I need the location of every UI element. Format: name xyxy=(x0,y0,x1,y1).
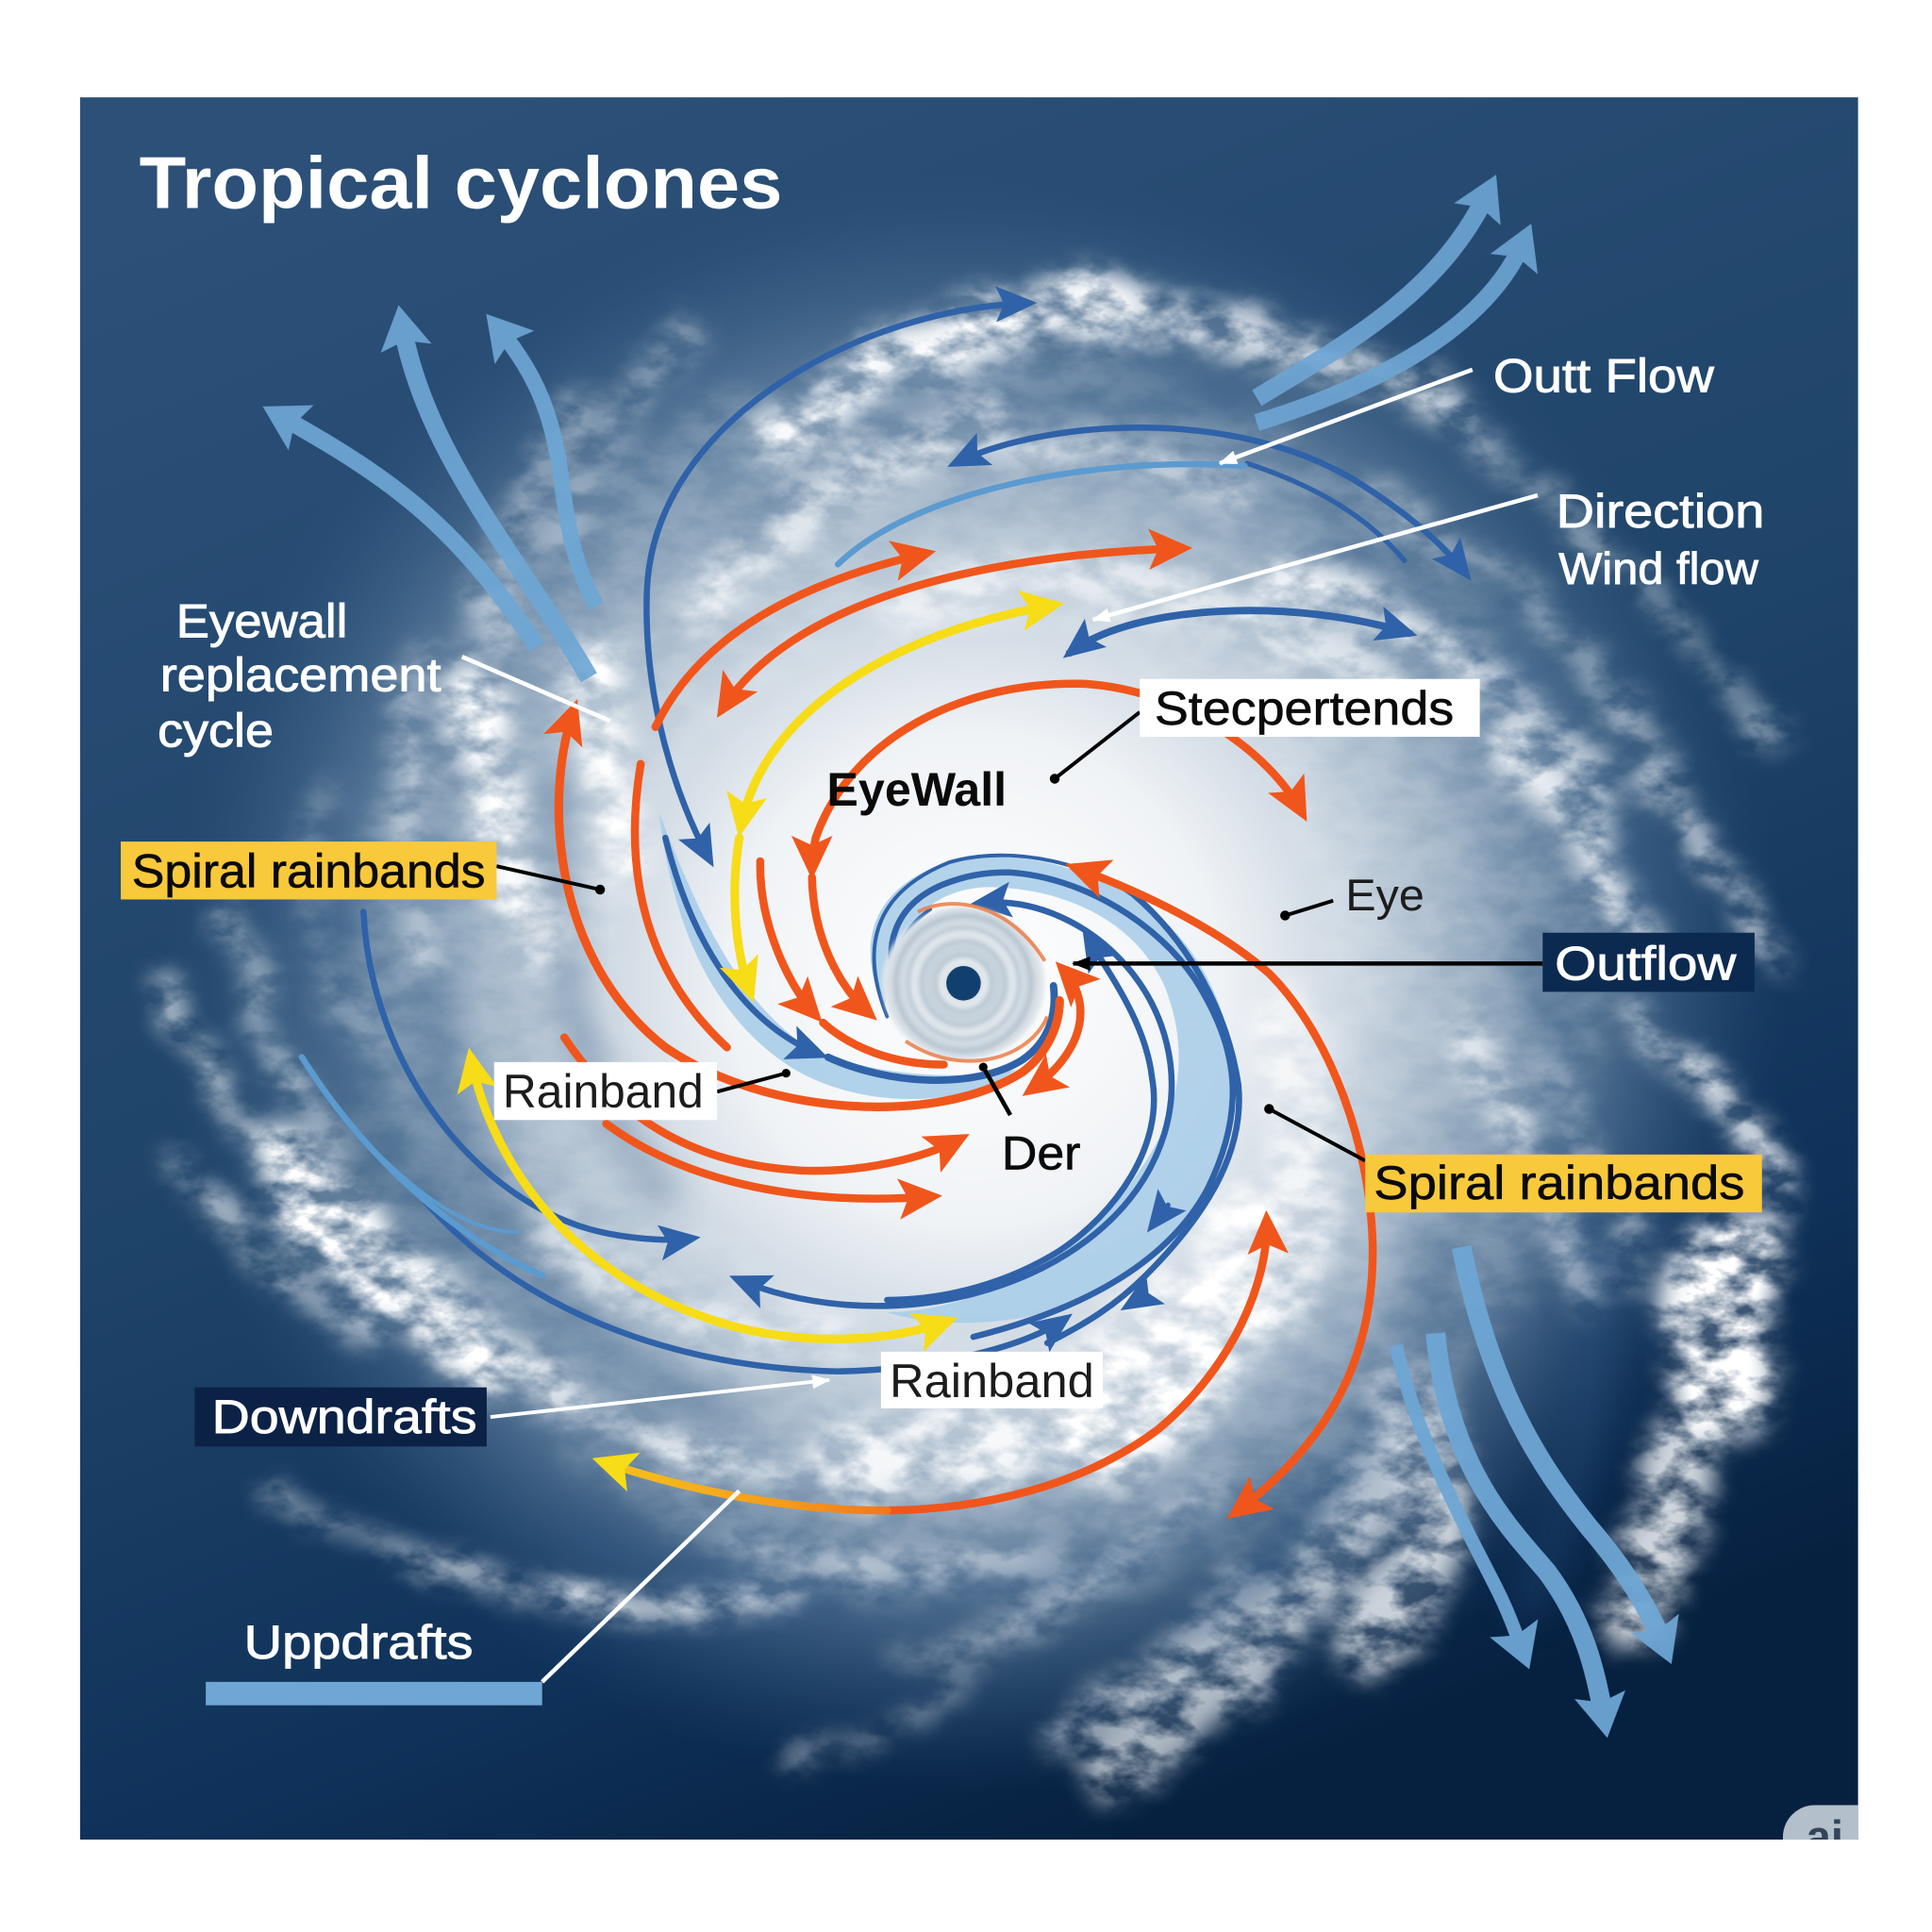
label: Eyewall replacement cycle: cycle xyxy=(158,705,274,758)
label: Rainband left xyxy=(494,1062,791,1120)
title: Tropical cyclones xyxy=(140,142,782,225)
label: Direction Wind flow xyxy=(1093,485,1764,620)
label: Outt Flow xyxy=(1220,349,1714,463)
label: Uppdrafts: Uppdrafts xyxy=(244,1616,474,1669)
watermark badge xyxy=(1783,1806,1858,1840)
label: Spiral rainbands right: Spiral rainbands xyxy=(1374,1157,1744,1209)
eye of the storm xyxy=(882,904,1047,1061)
label: Eye: Eye xyxy=(1345,870,1424,920)
label: Rainband bottom: Rainband xyxy=(890,1355,1094,1407)
label: Stecpertends xyxy=(1050,679,1480,784)
label: Spiral rainbands left: Spiral rainbands xyxy=(132,844,486,897)
label: Direction Wind flow: Direction xyxy=(1557,485,1764,538)
label: Downdrafts: Downdrafts xyxy=(212,1391,476,1443)
light blue outflow arrows: upper left xyxy=(278,323,596,677)
watermark badge: ai xyxy=(1807,1811,1843,1861)
label: Spiral rainbands left xyxy=(121,841,605,899)
label: Eyewall replacement cycle xyxy=(158,594,610,758)
yellow wind arrows xyxy=(471,605,1055,1339)
blue swirl arrows xyxy=(665,838,1239,1343)
dark gaps between cloud bands xyxy=(331,400,1651,1626)
blue circulation arrows xyxy=(363,303,1466,1372)
label: Der xyxy=(979,1063,1080,1180)
orange wind arrows xyxy=(558,548,1373,1513)
light blue outflow arrows: upper right xyxy=(1257,191,1524,423)
label: Outt Flow: Outt Flow xyxy=(1493,349,1714,402)
label: Eyewall replacement cycle: replacement xyxy=(160,649,441,702)
label: Rainband left: Rainband xyxy=(503,1065,704,1118)
label: Downdrafts xyxy=(194,1380,829,1446)
label: Stecpertends: Stecpertends xyxy=(1155,682,1454,735)
label: Direction Wind flow: Wind flow xyxy=(1558,543,1759,593)
label: Spiral rainbands right xyxy=(1264,1104,1762,1212)
swirl band: light blue left xyxy=(659,813,1017,1099)
label: Der: Der xyxy=(1002,1127,1080,1180)
cloud streaks xyxy=(160,295,1787,1774)
cyclone cloud disc xyxy=(226,238,1733,1753)
label: Eyewall replacement cycle: Eyewall xyxy=(176,594,347,647)
label: EyeWall: EyeWall xyxy=(826,763,1007,816)
light blue outflow arrows: lower right xyxy=(1396,1247,1665,1720)
light blue thin arrows xyxy=(302,464,1244,1275)
label: Uppdrafts xyxy=(206,1491,740,1706)
label: Outflow: Outflow xyxy=(1555,937,1736,990)
label: Eye xyxy=(1280,870,1424,921)
label: Outflow xyxy=(1074,933,1755,991)
swirl band: light blue around eye xyxy=(871,857,1235,1323)
